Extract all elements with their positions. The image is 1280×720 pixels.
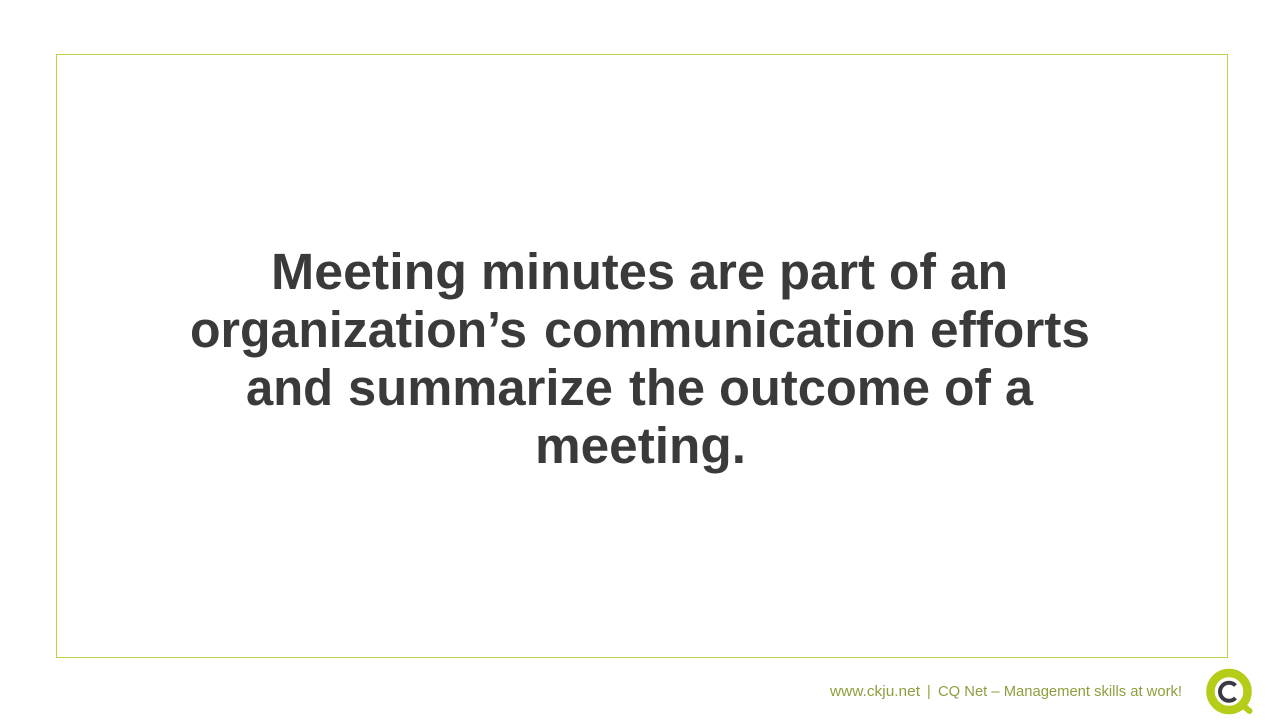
title: main statement: efforts bbox=[930, 301, 1090, 358]
title: main statement: a bbox=[1005, 359, 1034, 416]
title: main statement: communication bbox=[544, 301, 916, 358]
title: main statement: minutes bbox=[481, 243, 675, 300]
title: main statement: part bbox=[779, 243, 875, 300]
title: main statement: the bbox=[629, 359, 705, 416]
footer text: CQ Net – Management skills at work! bbox=[938, 684, 1182, 700]
panel: green outline frame bbox=[56, 54, 1228, 658]
title: main statement: of bbox=[889, 243, 937, 300]
footer text bbox=[829, 684, 1182, 700]
title: main statement: meeting. bbox=[535, 417, 746, 474]
title: main statement: summarize bbox=[348, 359, 613, 416]
title: main statement bbox=[190, 243, 1090, 474]
title: main statement: and bbox=[246, 359, 333, 416]
title: main statement: of bbox=[944, 359, 992, 416]
title: main statement: organization’s bbox=[190, 301, 527, 358]
footer text: | bbox=[927, 684, 931, 700]
title: main statement: outcome bbox=[719, 359, 930, 416]
title: main statement: an bbox=[950, 243, 1008, 300]
title: main statement: Meeting bbox=[271, 243, 467, 300]
icon: CQ logo bbox=[1210, 673, 1250, 711]
footer text: www.ckju.net bbox=[829, 684, 920, 700]
title: main statement: are bbox=[689, 243, 765, 300]
